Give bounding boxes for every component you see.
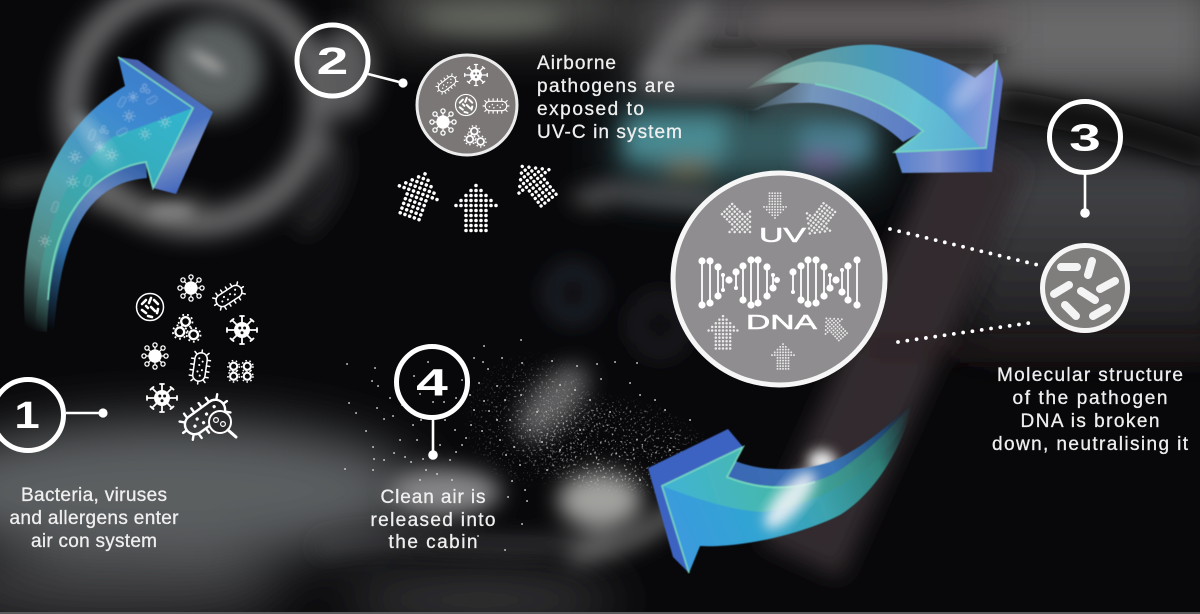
arrow 3 shaft band <box>727 402 913 486</box>
arrow 3 teal fold <box>662 402 913 512</box>
arrow 1 front face <box>24 57 193 332</box>
step 3 caption: of the pathogen <box>1012 388 1168 409</box>
step 1 marker <box>0 380 108 450</box>
step 2 pathogen circle <box>417 55 517 155</box>
arrow 1 head side <box>118 57 213 194</box>
DNA label: DNA <box>746 312 818 334</box>
step 3 caption: down, neutralising it <box>992 434 1189 455</box>
faint pathogens on arrow 1 <box>39 83 171 247</box>
step 1 caption: air con system <box>31 531 157 552</box>
arrow 3 head side <box>648 429 743 573</box>
dotted arrows rising into step 2 <box>391 155 564 230</box>
step 4 number badge and leader: 4 <box>416 362 448 404</box>
DNA helix <box>698 256 861 309</box>
step 2 caption: pathogens are <box>537 76 675 97</box>
air particles spray <box>345 340 721 550</box>
centre console pillar <box>800 150 985 560</box>
UV DNA circle <box>673 173 885 385</box>
UV arrows <box>709 193 851 369</box>
arrow 1: bottom-left rising arrow <box>24 57 213 332</box>
dashboard and screen <box>650 5 705 72</box>
UV label: UV <box>759 225 807 247</box>
step 3 number badge and leader: 3 <box>1069 117 1101 159</box>
arrow 2 front face <box>745 45 997 152</box>
step 3 caption: Molecular structure <box>997 365 1183 386</box>
step 1 caption <box>10 485 179 552</box>
step 3 number badge and leader <box>1050 102 1120 218</box>
arrow 1 shaft underside <box>47 162 147 332</box>
arrow 1 teal fold <box>35 108 193 332</box>
arrow 3 front face <box>662 402 913 573</box>
step 4 caption: released into <box>370 510 496 531</box>
step 3 caption <box>992 365 1189 455</box>
step 4 caption: Clean air is <box>380 487 486 508</box>
arrow 2 teal fold <box>763 62 980 152</box>
arrow 2: top-right arrow <box>745 45 1003 173</box>
step 4 number badge and leader <box>396 346 468 460</box>
step 1 caption: Bacteria, viruses <box>21 485 167 506</box>
arrow 2 head side <box>895 60 1003 173</box>
arrow 3: bottom arrow <box>648 402 913 573</box>
step 2 number badge <box>297 25 368 96</box>
step 2 marker: 2 <box>317 40 348 83</box>
arrow 2 shaft underside <box>750 83 923 142</box>
step 2 marker <box>297 25 408 96</box>
step 4 caption <box>370 487 496 553</box>
step 2 caption: UV-C in system <box>537 122 682 143</box>
step 1 pathogen icons <box>136 275 257 445</box>
magnified pathogen circle <box>1042 246 1128 330</box>
step 2 caption: Airborne <box>537 53 616 74</box>
step 1 marker: 1 <box>14 394 40 436</box>
arrow 1 glare <box>69 109 121 171</box>
arrow 3 glare <box>757 464 823 536</box>
dotted connector lines <box>890 229 1038 342</box>
step 4 caption: the cabin <box>388 532 478 553</box>
step 2 caption: exposed to <box>537 99 644 120</box>
arrow 2 glare <box>945 65 991 115</box>
step 1 caption: and allergens enter <box>10 508 179 529</box>
step 3 caption: DNA is broken <box>1020 411 1160 432</box>
gear shifter and tunnel <box>389 468 501 516</box>
step 2 caption <box>537 53 682 143</box>
steering wheel <box>71 0 319 223</box>
step 1 number badge <box>0 380 64 450</box>
vent knobs <box>551 269 595 317</box>
